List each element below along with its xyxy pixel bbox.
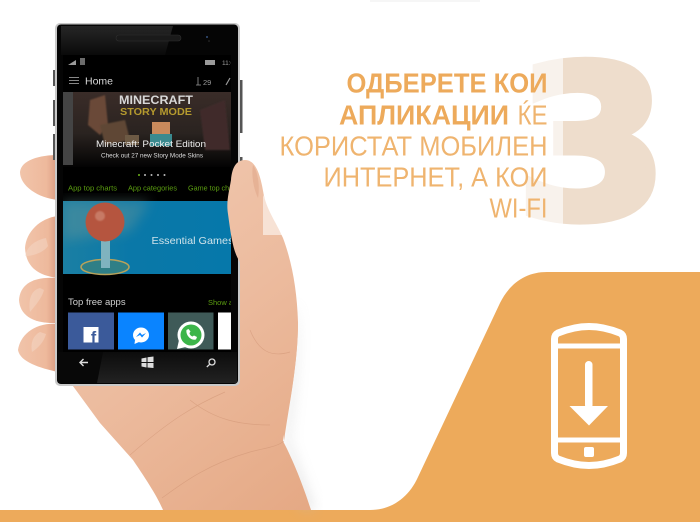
status bar: 11:0	[222, 60, 235, 67]
minecraft banner: MINECRAFT	[119, 93, 194, 107]
minecraft banner	[63, 92, 231, 167]
bottom bezel	[58, 352, 237, 383]
hand behind the phone	[18, 155, 316, 510]
thumb and right side of the hand over the phone edge	[130, 160, 298, 498]
essential games banner	[63, 201, 234, 274]
category links: Game top charts	[188, 184, 242, 192]
category links: App categories	[128, 184, 177, 192]
minecraft banner: Minecraft: Pocket Edition	[96, 139, 206, 150]
screen	[63, 55, 242, 352]
heading text	[280, 68, 548, 224]
tile: white partial	[218, 312, 232, 350]
finger 3	[19, 278, 58, 323]
tile: facebook	[68, 312, 114, 350]
essential games banner: Essential Games	[152, 235, 234, 247]
category links	[68, 185, 230, 192]
heading text: WI-FI	[490, 192, 548, 224]
screen: Show all	[208, 298, 237, 307]
thumbnail edge shading	[252, 165, 259, 198]
tile: facebook: f	[91, 330, 97, 346]
tile: messenger	[118, 312, 164, 350]
heading text: АПЛИКАЦИИ	[339, 100, 509, 130]
finger 1	[20, 155, 58, 200]
big number 3: 3	[516, 22, 668, 267]
nav: back arrow	[80, 359, 88, 366]
palm crease lines	[130, 330, 290, 498]
finger 2	[25, 216, 58, 278]
nav: windows logo	[142, 356, 154, 368]
heading text: ИНТЕРНЕТ, А КОИ	[324, 162, 548, 192]
status bar	[68, 58, 231, 65]
phone	[53, 23, 242, 386]
wrist shadow	[284, 300, 316, 510]
phone body	[55, 23, 240, 386]
nav: search	[207, 359, 215, 367]
heading text: КОРИСТАТ МОБИЛЕН	[280, 130, 548, 162]
category links: App top charts	[68, 184, 117, 192]
minecraft banner: STORY MODE	[120, 107, 192, 118]
top bezel	[61, 26, 173, 55]
app bar	[69, 77, 230, 86]
tile: whatsapp	[168, 312, 214, 350]
big number 3	[526, 56, 656, 225]
app bar: Home	[85, 76, 113, 88]
top free apps heading: Top free apps	[68, 297, 126, 308]
app bar: 29	[203, 78, 211, 87]
side buttons	[53, 70, 242, 167]
finger 4	[18, 324, 58, 372]
heading text: ОДБЕРЕТЕ КОИ	[346, 68, 548, 98]
big number 3: 3	[516, 22, 668, 267]
minecraft banner: Check out 27 new Story Mode Skins	[101, 152, 204, 160]
heading text: ЌЕ	[518, 100, 548, 130]
fingernails	[25, 238, 48, 352]
translucent white overlay on thumb	[263, 195, 285, 235]
carousel dots	[138, 174, 166, 176]
palm and wrist	[70, 300, 311, 510]
orange background panel	[0, 272, 700, 522]
icon: phone with download arrow	[554, 326, 624, 466]
